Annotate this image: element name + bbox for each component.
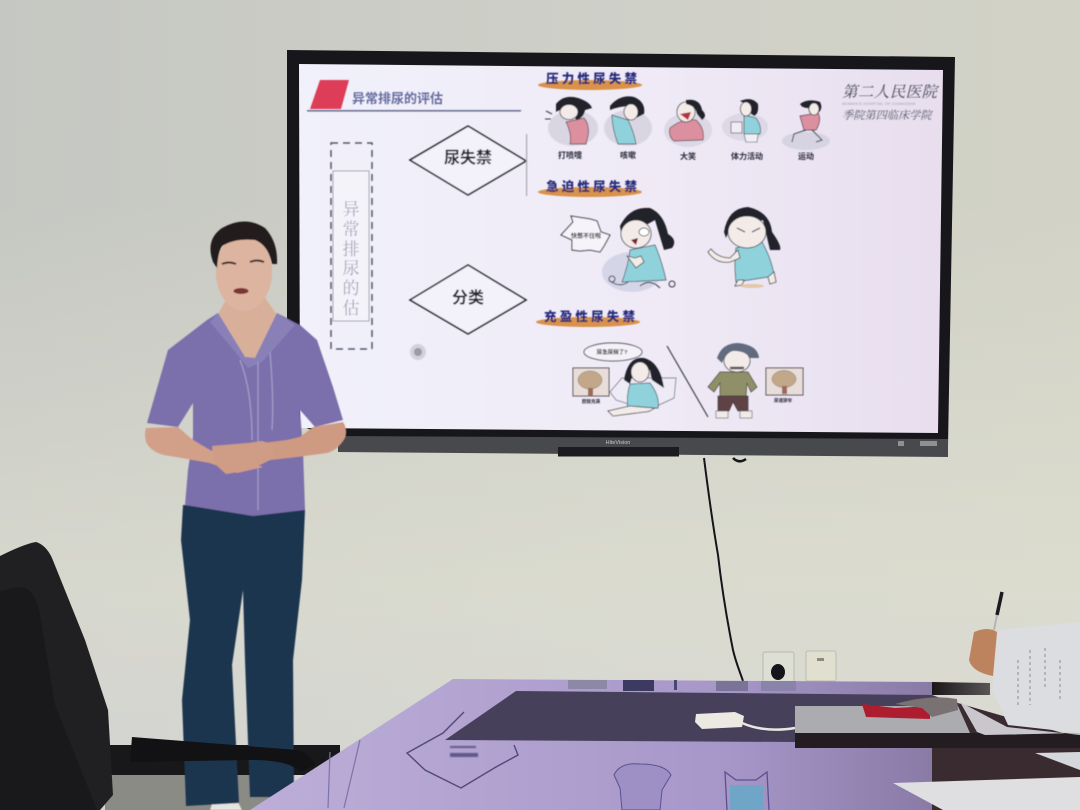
diagonal divider: [667, 346, 708, 417]
slide title: [307, 80, 521, 112]
hospital logo: 季院第四临床学院: [842, 109, 933, 122]
figure: laughing: 大笑: [680, 151, 696, 161]
small paper at right edge: [1035, 752, 1080, 770]
hospital logo: [842, 83, 940, 122]
diamond: urinary incontinence: 尿失禁: [444, 149, 492, 167]
figure: physical activity: 体力活动: [731, 151, 763, 161]
right arm: [263, 422, 346, 460]
slide contents: [307, 71, 940, 418]
chair arm over the legs: [130, 737, 315, 772]
reflected figures: [614, 764, 769, 810]
heading: urge incontinence: 急迫性尿失禁: [546, 179, 640, 194]
laptop reflection: [795, 733, 1080, 748]
slide surface: [299, 64, 943, 433]
vertical label: 常: [342, 220, 360, 239]
front chair: [0, 588, 97, 810]
laptop: [795, 706, 970, 733]
brand label: HiteVision: [606, 440, 630, 446]
hospital logo: WOMEN'S HOSPITAL OF CHANGSHA: [842, 102, 916, 106]
centre base of the screen: [558, 447, 679, 456]
dark table edge and reflection: [900, 695, 1080, 810]
figure: physical activity: [722, 99, 768, 161]
figure: running: [782, 100, 830, 161]
pen: [994, 592, 1002, 630]
screen bezel: [287, 50, 955, 446]
cable clip: [733, 458, 746, 461]
face: [216, 233, 272, 311]
vertical label: 异: [342, 200, 360, 219]
figure: running: 运动: [798, 151, 814, 161]
red title marker: [310, 80, 349, 109]
conference table: [250, 679, 1080, 810]
figure: sneezing: 打喷嚏: [558, 150, 582, 160]
hospital logo: 第二人民医院: [842, 83, 940, 101]
bladder diagram: 膀胱充满: [582, 398, 600, 405]
lavender reflection of the screen: [250, 679, 932, 810]
vertical label: 排: [342, 240, 360, 259]
reflected diamond outline: [407, 712, 518, 788]
dark frame at far edge: [932, 682, 990, 695]
reflected blurred label: [450, 746, 478, 757]
zipper and strings: [240, 352, 273, 510]
thought bubble: 尿急尿频了?: [597, 348, 628, 356]
figure: coughing: [604, 96, 652, 160]
presenter: [145, 222, 346, 810]
title underline: [307, 110, 521, 112]
scribbled lines on the document: [1018, 648, 1060, 705]
heading: stress incontinence: [538, 71, 642, 90]
diamond: classification: [410, 265, 526, 334]
right status icons: [898, 441, 937, 446]
wall-mounted screen: [287, 50, 955, 461]
figure: coughing: 咳嗽: [620, 150, 636, 160]
upper reflections: [568, 680, 796, 691]
reflected dashed label: [328, 740, 360, 808]
heading: stress incontinence: 压力性尿失禁: [546, 71, 640, 86]
floor and skirting: [105, 745, 340, 810]
hood folds: [210, 313, 295, 368]
left dashed box with vertical label: [331, 143, 372, 349]
mouth: [234, 288, 248, 294]
vertical label: 尿: [342, 259, 360, 278]
seated person's hand, pen and document: [969, 592, 1080, 733]
white adapter and cable: [695, 712, 795, 730]
vertical separator: [526, 134, 527, 196]
dashed frame: [331, 143, 372, 349]
figure: sneezing: [545, 97, 598, 160]
screen power cable: [704, 458, 743, 681]
red object and keys: [862, 697, 958, 719]
title text: 异常排尿的评估: [352, 91, 443, 106]
top: [147, 313, 343, 516]
figure: overflow man with bladder diagram: [708, 343, 803, 418]
hand: [969, 629, 997, 676]
rear chair: [0, 542, 113, 810]
left arm: [145, 427, 263, 473]
held document: [992, 622, 1080, 733]
inner frame: [333, 171, 369, 321]
eyes: [222, 260, 264, 264]
shoe: [210, 802, 242, 810]
figure: laughing: [664, 100, 712, 161]
vertical label: 估: [342, 299, 360, 318]
bladder diagram: 尿道狭窄: [774, 397, 792, 404]
diamond: urinary incontinence: [410, 126, 526, 195]
switch plate: [806, 651, 836, 681]
neck: [218, 296, 277, 360]
speech burst: 快憋不住啦: [571, 232, 601, 240]
figure: urgent woman with speech burst: [561, 208, 675, 292]
socket with plug: [763, 652, 794, 683]
diamond: classification: 分类: [452, 289, 484, 307]
heading: overflow incontinence: 充盈性尿失禁: [544, 309, 638, 324]
small emblem: [410, 344, 426, 360]
chairs at lower left: [0, 542, 113, 810]
paper on the table: [893, 777, 1080, 810]
wall power sockets: [763, 651, 836, 683]
figure: overflow woman with bladder diagram: [573, 343, 676, 416]
vertical label: 的: [342, 279, 360, 298]
hair: [210, 222, 277, 268]
figure: woman leaking while walking: [708, 207, 780, 288]
hands: [212, 441, 274, 474]
jeans: [181, 505, 305, 806]
stack of papers: [960, 702, 1080, 735]
dark desk mat: [445, 691, 960, 742]
lower bar of the screen: [338, 436, 948, 457]
